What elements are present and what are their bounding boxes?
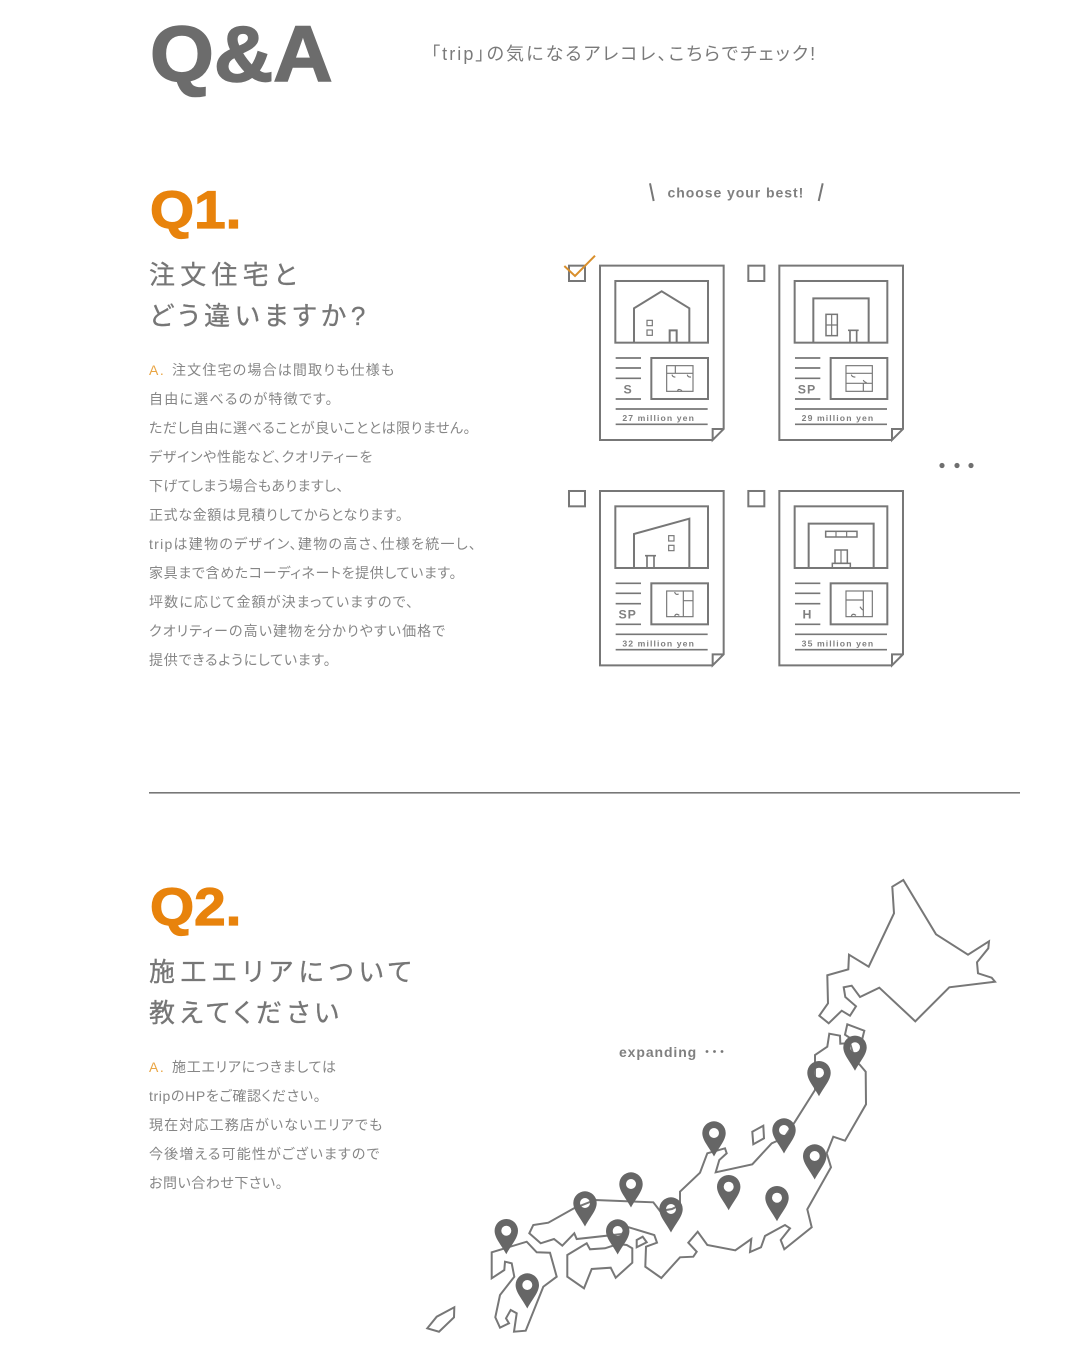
Q1 answer text: 下げてしまう場合もありますし、 (149, 478, 344, 494)
panel: plan S with checked box: 27 million yen (622, 413, 695, 423)
Q2 answer text: tripのHPをご確認ください。 (149, 1088, 321, 1104)
more plans dots (939, 463, 974, 468)
choose your best label: choose your best! (668, 184, 804, 200)
Q1 answer text: 坪数に応じて金額が決まっていますので、 (149, 594, 414, 610)
map pins (495, 1036, 867, 1308)
Q1 question (149, 260, 370, 331)
Q1 answer text: ただし自由に選べることが良いこととは限りません。 (149, 420, 471, 436)
Q2 question: 施工エリアについて (149, 957, 417, 987)
panel: plan SP 32 million: 32 million yen (622, 638, 695, 648)
panel: plan H 35 million: H (803, 608, 812, 622)
panel: plan SP 32 million (569, 491, 724, 665)
Q1 answer text: tripは建物のデザイン、建物の高さ、仕様を統一し、 (149, 536, 477, 552)
map: Japan outline (427, 880, 995, 1332)
Q2 answer text (149, 1059, 383, 1191)
panel: plan S with checked box (564, 256, 724, 440)
Q1 answer text: 提供できるようにしています。 (149, 652, 331, 668)
panel: plan S with checked box: S (624, 382, 632, 396)
Q1 question: どう違いますか? (149, 301, 370, 331)
Q2 answer text: 現在対応工務店がいないエリアでも (149, 1117, 383, 1133)
subtitle: 「trip」の気になるアレコレ、こちらでチェック! (431, 44, 817, 64)
Q1 question: 注文住宅と (149, 260, 302, 290)
panel: plan SP 29 million: SP (798, 382, 816, 396)
Q1 answer text: A. (149, 362, 165, 378)
panel: plan SP 32 million: SP (618, 608, 637, 622)
Q1 answer text: 正式な金額は見積りしてからとなります。 (149, 507, 403, 523)
Q1 answer text (149, 362, 477, 668)
Q2 answer text: お問い合わせ下さい。 (149, 1175, 283, 1191)
map: Hokkaido (819, 880, 995, 1023)
panel: plan SP 29 million: 29 million yen (802, 413, 874, 423)
panel: plan H 35 million: 35 million yen (802, 638, 874, 648)
Q2 answer text: 施工エリアにつきましては (172, 1059, 337, 1075)
Q2 question: 教えてください (149, 998, 343, 1028)
Q1 answer text: 注文住宅の場合は間取りも仕様も (172, 362, 395, 378)
Q2 question (149, 957, 417, 1028)
Q1 answer text: 自由に選べるのが特徴です。 (149, 391, 334, 407)
Q1 answer text: クオリティーの高い建物を分かりやすい価格で (149, 623, 446, 639)
Q1 heading: Q1. (150, 181, 241, 240)
panel: plan H 35 million (748, 491, 903, 665)
Q1 answer text: 家具まで含めたコーディネートを提供しています。 (149, 565, 457, 581)
Q1 answer text: デザインや性能など、クオリティーを (149, 449, 373, 465)
panel: plan SP 29 million (748, 266, 903, 440)
title: Q&A (150, 9, 333, 98)
Q2 answer text: A. (149, 1059, 165, 1075)
expanding label: expanding (619, 1044, 697, 1060)
Q2 heading: Q2. (150, 878, 241, 937)
Q2 answer text: 今後増える可能性がございますので (149, 1146, 381, 1162)
